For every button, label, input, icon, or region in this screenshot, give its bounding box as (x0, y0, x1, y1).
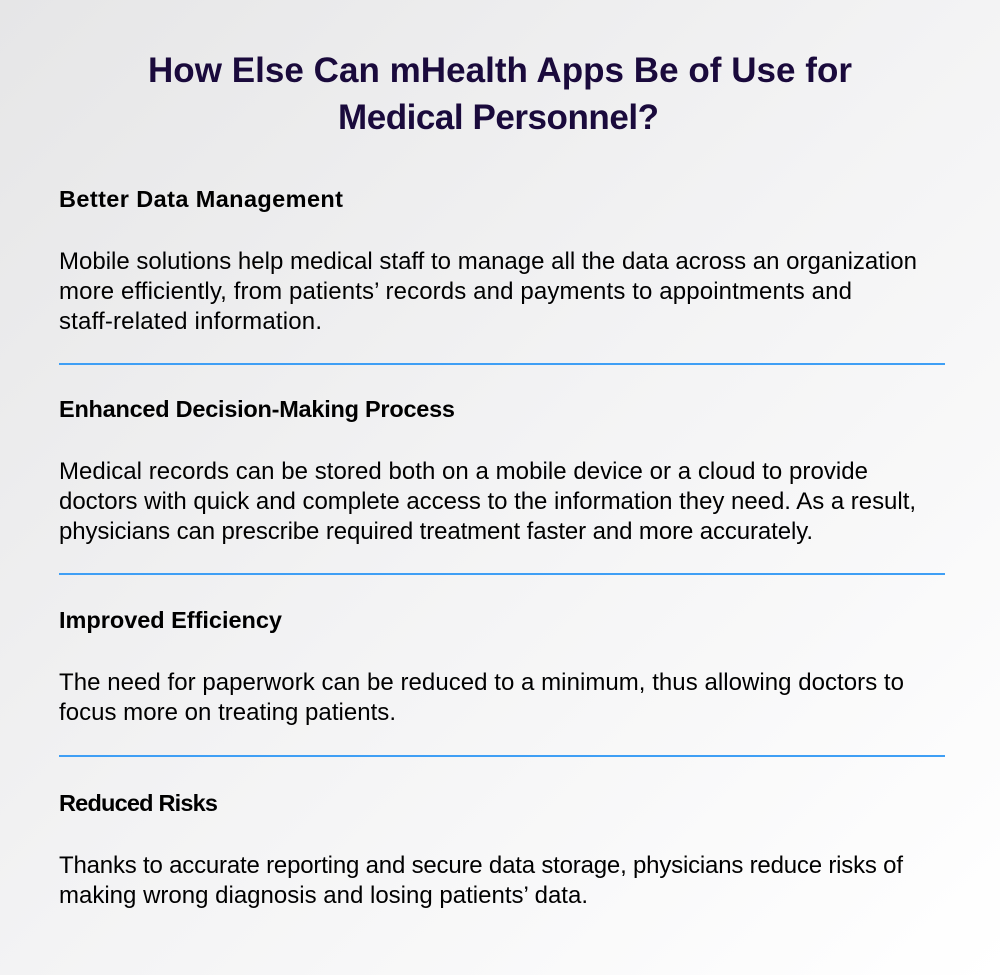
panel: improved efficiency (59, 607, 904, 726)
heading: improved efficiency: Improved Efficiency (59, 607, 282, 633)
text block: enhanced decision-making process: Medical records can be stored both on a mobile device or a cloud to provide (59, 458, 868, 485)
text block: reduced risks: making wrong diagnosis and losing patients’ data. (59, 882, 588, 909)
heading: reduced risks: Reduced Risks (59, 790, 218, 816)
text block: better data management: Mobile solutions help medical staff to manage all the data across an organization (59, 248, 917, 275)
title: How Else Can mHealth Apps Be of Use for (148, 51, 852, 90)
text block: reduced risks: Thanks to accurate reporting and secure data storage, physicians reduce risks of (59, 852, 903, 879)
text block: better data management: more efficiently, from patients’ records and payments to appointments and (59, 278, 852, 305)
heading: enhanced decision-making process: Enhanced Decision-Making Process (59, 396, 455, 422)
panel: better data management (59, 186, 917, 335)
text block: better data management (59, 248, 917, 335)
title (148, 51, 852, 137)
text block: enhanced decision-making process (59, 458, 916, 545)
text block: reduced risks (59, 852, 903, 909)
panel: reduced risks (59, 790, 903, 909)
heading: better data management: Better Data Management (59, 186, 343, 212)
title: Medical Personnel? (338, 98, 659, 137)
text block: improved efficiency (59, 669, 904, 726)
text block: better data management: staff-related information. (59, 308, 322, 335)
text block: enhanced decision-making process: physicians can prescribe required treatment faster and more accurately. (59, 518, 813, 545)
text block: enhanced decision-making process: doctors with quick and complete access to the information they need. As a result, (59, 488, 916, 515)
panel: enhanced decision-making process (59, 396, 916, 545)
text block: improved efficiency: focus more on treating patients. (59, 699, 396, 726)
text block: improved efficiency: The need for paperwork can be reduced to a minimum, thus allowing doctors to (59, 669, 904, 696)
